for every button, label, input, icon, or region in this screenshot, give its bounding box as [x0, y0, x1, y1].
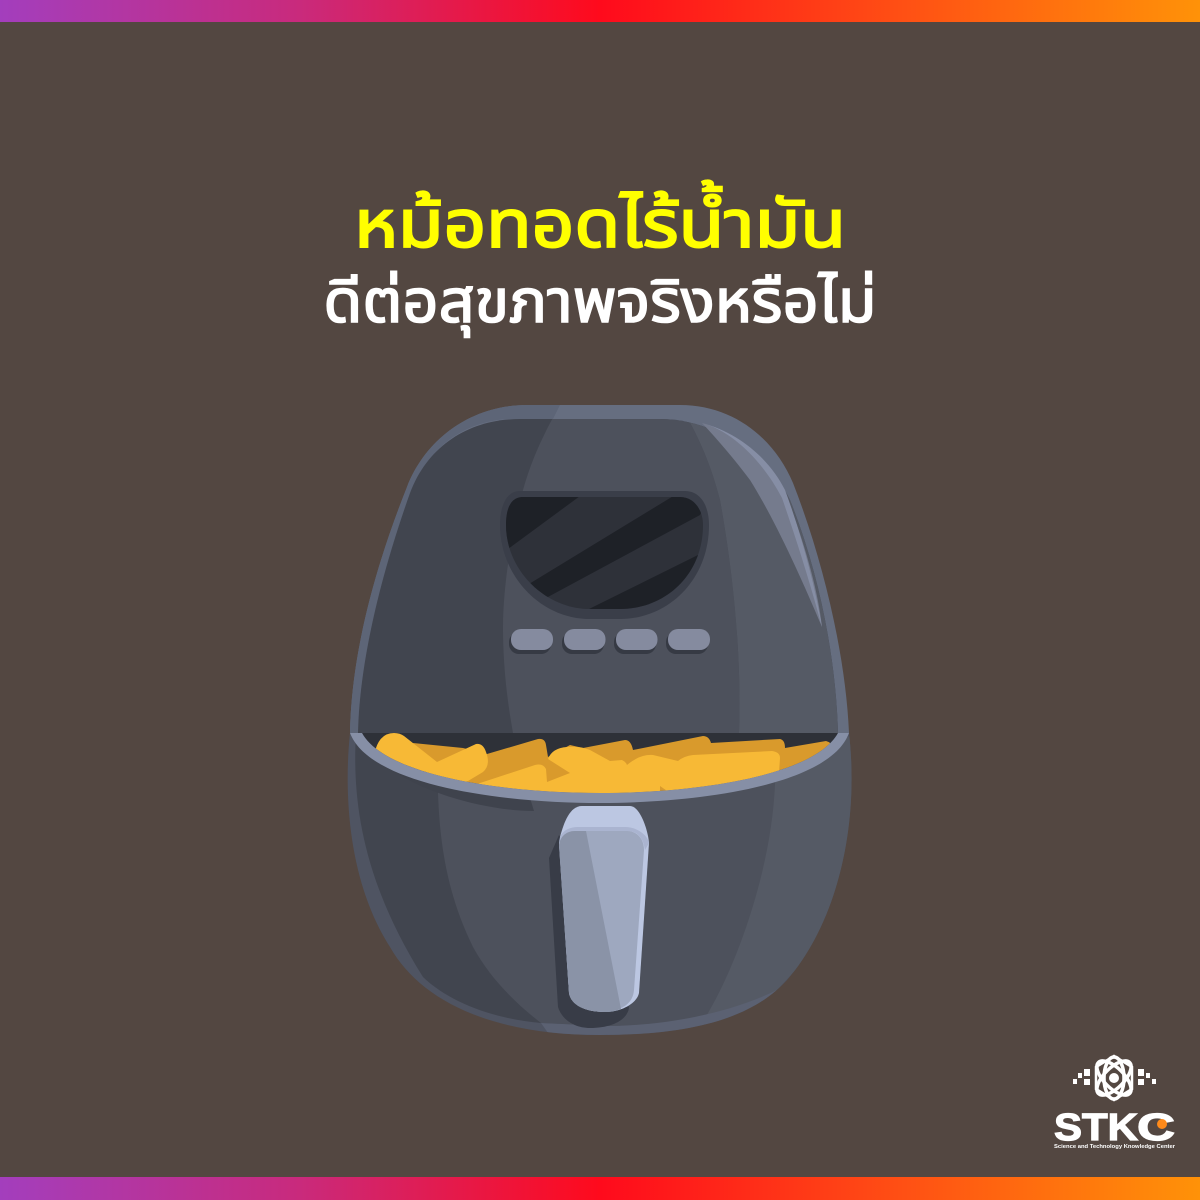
screen glass: [506, 497, 703, 609]
logo pixel squares: [1073, 1069, 1156, 1085]
top gradient bar: [0, 0, 1200, 22]
control buttons: [509, 629, 710, 654]
screen frame: [500, 491, 709, 619]
display screen: [500, 490, 710, 619]
basket lower body: [348, 733, 860, 1040]
title line 2: ดีต่อสุขภาพจริงหรือไม่: [324, 268, 876, 338]
basket opening: [362, 733, 838, 757]
logo atom icon: [1091, 1055, 1137, 1101]
logo wordmark: STK: [1054, 1107, 1139, 1149]
logo orange dot: [1157, 1119, 1167, 1129]
body highlight: [702, 423, 822, 627]
front fries: [376, 733, 488, 782]
basket rim: [350, 733, 849, 803]
rim shadow: [397, 773, 534, 811]
air fryer illustration: [340, 405, 860, 1040]
handle shaded side: [559, 831, 621, 1012]
bottom gradient bar: [0, 1177, 1200, 1200]
french fries: [376, 733, 830, 793]
logo tagline: Science and Technology Knowledge Center: [1054, 1144, 1176, 1150]
handle shadow: [549, 835, 629, 1028]
title line 1: หม้อทอดไร้น้ำมัน: [354, 180, 846, 261]
handle face: [559, 831, 644, 1012]
title: [324, 180, 876, 338]
handle back: [559, 806, 649, 1012]
main upper body: [350, 405, 850, 733]
logo wordmark: C: [1137, 1107, 1175, 1149]
handle: [549, 806, 649, 1028]
handle top bevel: [560, 827, 649, 850]
STKC logo: [1054, 1055, 1176, 1150]
back fries: [413, 736, 830, 793]
logo wordmark: [1054, 1107, 1175, 1149]
